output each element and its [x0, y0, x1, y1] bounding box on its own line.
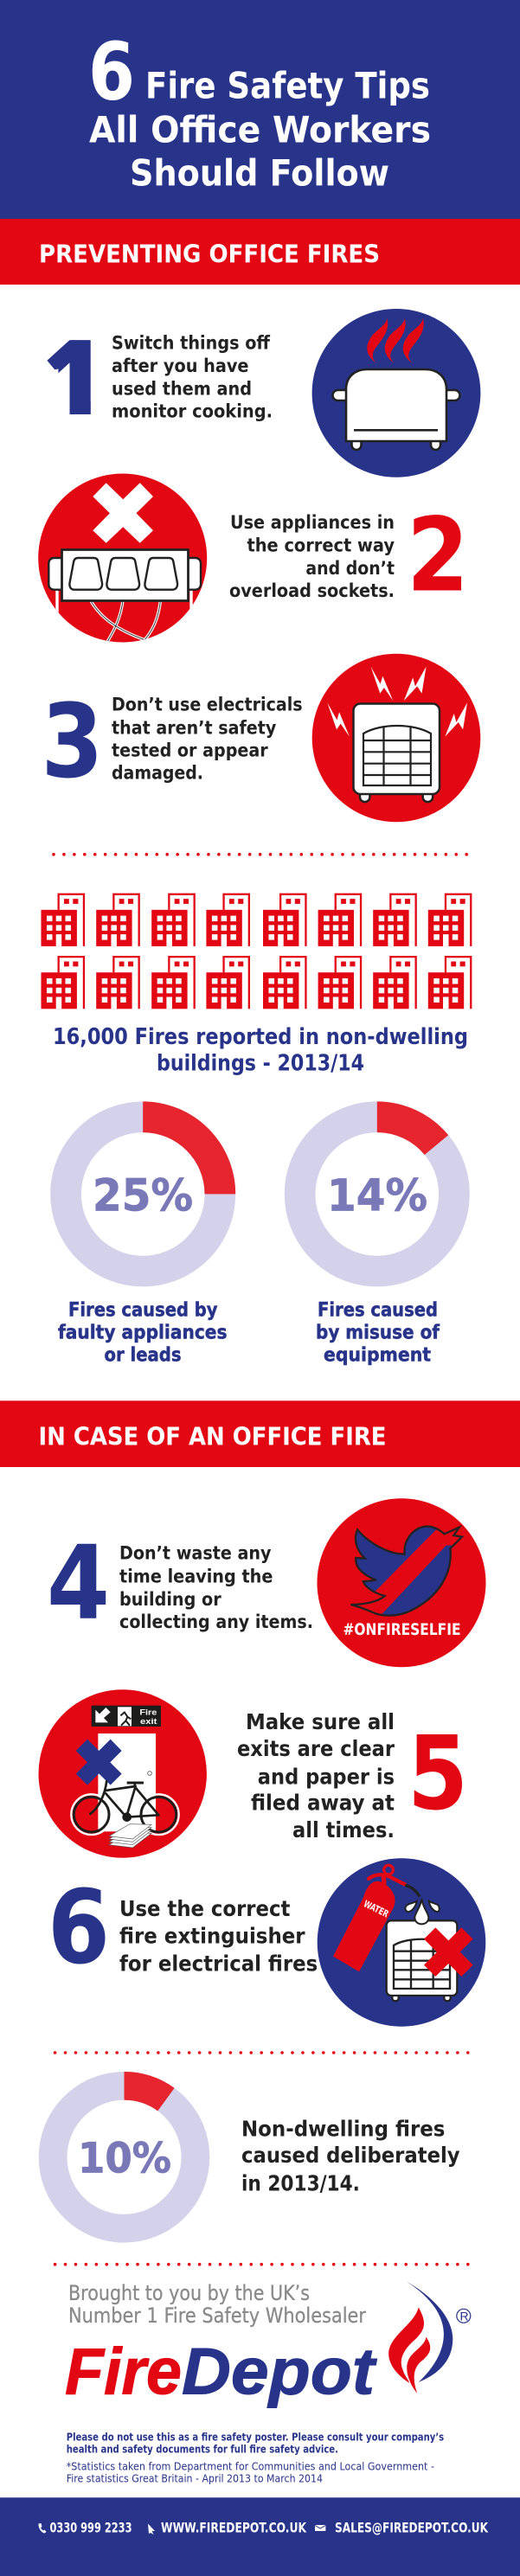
dotted divider	[55, 2263, 468, 2265]
tip 5 text: all times.	[292, 1817, 395, 1842]
donut chart: 25%	[66, 1101, 235, 1272]
icon: water extinguisher on heater: WATER	[362, 1898, 391, 1920]
tip 2 text: the correct way	[247, 535, 395, 556]
icon: damaged heater	[312, 654, 480, 822]
tip 6 number: 6	[48, 1868, 110, 1987]
statistic heading: 16,000 Fires reported in non-dwelling	[53, 1024, 468, 1050]
donut chart: 10%	[53, 2072, 196, 2228]
statistic heading	[53, 1024, 468, 1077]
disclaimer: health and safety documents for full fire safety advice.	[67, 2444, 338, 2456]
caption: misuse of equipment	[316, 1298, 440, 1366]
icon: blocked fire exit	[38, 1689, 207, 1858]
tip 3 text: damaged.	[112, 763, 203, 785]
caption: faulty appliances: faulty appliances	[58, 1321, 227, 1343]
statistic text: deliberate fires: Non-dwelling fires	[241, 2116, 445, 2141]
icon: envelope	[315, 2525, 325, 2531]
tip 5 text	[237, 1709, 395, 1842]
icon: phone	[38, 2523, 47, 2533]
disclaimer: *Statistics taken from Department for Communities and Local Government -	[67, 2461, 434, 2473]
tip 4 text: Don’t waste any	[119, 1543, 272, 1565]
icon: crossed-out twitter bird	[317, 1498, 486, 1667]
statistic text: deliberate fires	[241, 2116, 460, 2195]
tip 4 text: collecting any items.	[119, 1612, 313, 1633]
tip 5 number: 5	[408, 1714, 468, 1833]
tip 1 text: monitor cooking.	[112, 401, 273, 423]
caption: faulty appliances	[58, 1298, 227, 1366]
dotted divider	[55, 2051, 468, 2054]
tip 4 text	[119, 1543, 313, 1633]
FireDepot logo	[65, 2281, 471, 2408]
footer: 0330 999 2233	[50, 2520, 132, 2536]
brought to you by text	[68, 2281, 366, 2328]
header banner	[0, 0, 520, 219]
tip 6 text: fire extinguisher	[119, 1924, 305, 1949]
statistic text: deliberate fires: in 2013/14.	[241, 2170, 360, 2195]
caption: misuse of equipment: by misuse of	[316, 1321, 440, 1343]
fire exit sign	[92, 1706, 161, 1727]
title: 6	[88, 26, 135, 118]
tip 3 text	[112, 695, 303, 785]
caption: misuse of equipment: Fires caused	[318, 1298, 438, 1321]
donut chart: 10%: 10%	[78, 2135, 171, 2183]
icon: overloaded socket	[38, 474, 207, 644]
pictogram: office buildings	[42, 894, 472, 1009]
tip 2 text: overload sockets.	[229, 580, 395, 602]
tip 5 text: and paper is	[258, 1764, 395, 1789]
icon: crossed-out twitter bird: #ONFIRESELFIE	[343, 1621, 460, 1639]
section heading: preventing office fires: PREVENTING OFFICE FIRES	[39, 240, 380, 268]
tip 4 text: time leaving the	[119, 1566, 273, 1587]
footer	[0, 2497, 520, 2576]
FireDepot logo: Depot	[182, 2335, 377, 2408]
statistic text: deliberate fires: caused deliberately	[241, 2143, 460, 2168]
FireDepot logo: R	[460, 2310, 469, 2323]
brought to you by text: Number 1 Fire Safety Wholesaler	[68, 2304, 366, 2328]
caption: faulty appliances: or leads	[104, 1343, 182, 1366]
tip 5 text: exits are clear	[237, 1736, 395, 1761]
section heading: in case of an office fire	[0, 1400, 520, 1467]
tip 1 text	[112, 332, 273, 423]
tip 3 number: 3	[42, 682, 104, 801]
tip 6 text	[119, 1896, 318, 1976]
title: Should Follow	[130, 152, 389, 194]
icon: cursor	[148, 2524, 155, 2534]
icon: toaster with heat	[312, 309, 480, 477]
caption: faulty appliances: Fires caused by	[68, 1298, 218, 1321]
tip 3 text: tested or appear	[112, 740, 268, 761]
footer: WWW.FIREDEPOT.CO.UK	[161, 2520, 306, 2536]
donut chart: 14%	[300, 1101, 454, 1272]
dotted divider	[54, 853, 467, 856]
donut chart: 14%: 14%	[327, 1170, 427, 1221]
tip 5 text: Make sure all	[246, 1709, 395, 1734]
tip 3 text: that aren’t safety	[112, 717, 276, 739]
section heading: in case of an office fire: IN CASE OF AN OFFICE FIRE	[38, 1423, 386, 1451]
tip 4 text: building or	[119, 1589, 221, 1611]
fire exit sign: Fire	[139, 1708, 157, 1716]
disclaimer: Please do not use this as a fire safety poster. Please consult your company’s	[67, 2432, 444, 2444]
disclaimer: Fire statistics Great Britain - April 2013 to March 2014	[67, 2472, 323, 2484]
tip 6 text: for electrical fires	[119, 1951, 318, 1976]
tip 4 number: 4	[47, 1523, 110, 1643]
FireDepot logo: Fire	[65, 2335, 182, 2408]
tip 5 text: filed away at	[251, 1791, 395, 1816]
title	[88, 26, 431, 194]
icon: water extinguisher on heater	[318, 1858, 485, 2027]
tip 6 text: Use the correct	[119, 1896, 290, 1921]
title: Fire Safety Tips	[145, 64, 430, 107]
statistic heading: buildings - 2013/14	[157, 1051, 364, 1077]
tip 1 number: 1	[42, 319, 113, 439]
tip 2 number: 2	[407, 496, 469, 615]
tip 3 text: Don’t use electricals	[112, 695, 303, 716]
title: All Office Workers	[89, 109, 431, 151]
fire exit sign: exit	[140, 1717, 157, 1726]
tip 2 text: Use appliances in	[230, 512, 395, 534]
caption: misuse of equipment: equipment	[324, 1343, 431, 1366]
tip 1 text: Switch things off	[112, 332, 271, 355]
donut chart: 25%: 25%	[93, 1170, 193, 1221]
tip 2 text	[229, 512, 395, 602]
disclaimer	[67, 2432, 444, 2484]
tip 1 text: used them and	[112, 379, 252, 400]
tip 2 text: and don’t	[305, 558, 395, 580]
section heading: preventing office fires	[0, 219, 520, 285]
tip 1 text: after you have	[112, 356, 249, 377]
brought to you by text: Brought to you by the UK’s	[68, 2281, 310, 2305]
